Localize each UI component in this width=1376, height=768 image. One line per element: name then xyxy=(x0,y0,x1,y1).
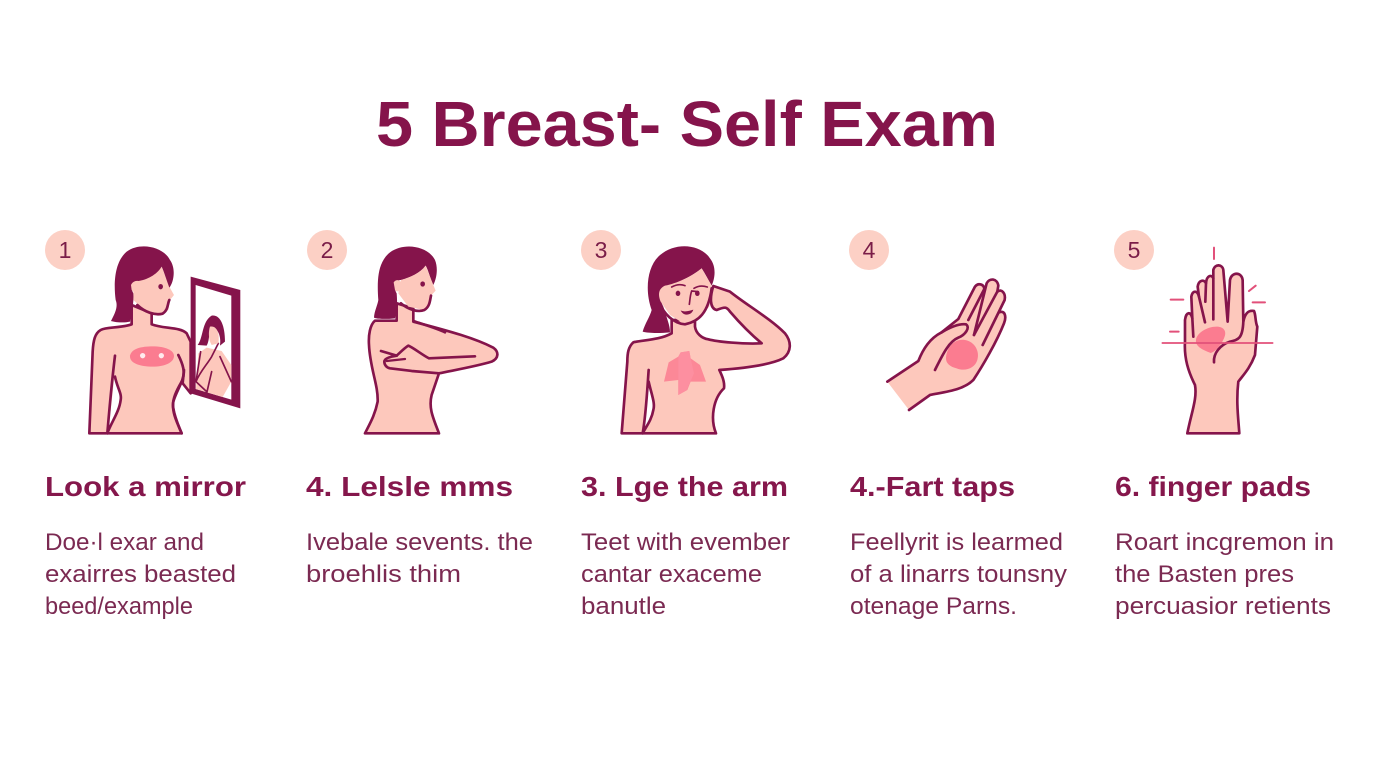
panel: step 2 raised arm xyxy=(307,230,497,433)
panel: step 3 hand behind head xyxy=(581,230,790,433)
icon: woman with arm across chest xyxy=(365,247,497,433)
step 2 description: broehlis thim xyxy=(306,561,461,588)
step 1 description: beed/example xyxy=(45,593,193,620)
title: 5 Breast- Self Exam xyxy=(376,88,998,160)
icon: woman with hand behind head xyxy=(622,246,790,433)
number badge 1 xyxy=(45,230,85,270)
icon: raised palm with lines xyxy=(1162,248,1273,433)
number badge 1: 1 xyxy=(59,237,71,263)
number badge 2 xyxy=(307,230,347,270)
step 1 heading: Look a mirror xyxy=(45,471,246,502)
step 4 heading: 4.-Fart taps xyxy=(850,471,1015,502)
step 3 description xyxy=(581,529,790,620)
step 5 heading: 6. finger pads xyxy=(1115,471,1311,502)
step 5 description: the Basten pres xyxy=(1115,561,1294,588)
step 4 description: otenage Parns. xyxy=(850,593,1017,620)
number badge 4 xyxy=(849,230,889,270)
number badge 2: 2 xyxy=(321,237,333,263)
step 3 heading: 3. Lge the arm xyxy=(581,471,788,502)
step 3 description: Teet with evember xyxy=(581,529,790,556)
step 3 description: cantar exaceme xyxy=(581,561,762,588)
step 2 heading: 4. Lelsle mms xyxy=(306,471,513,502)
step 3 description: banutle xyxy=(581,593,666,620)
step 1 description: exairres beasted xyxy=(45,561,236,588)
icon: woman looking in mirror xyxy=(89,246,240,433)
number badge 4: 4 xyxy=(863,237,876,263)
step 2 description xyxy=(306,529,533,588)
step 1 description xyxy=(45,529,236,620)
panel: step 4 hand xyxy=(849,230,1005,410)
step 1 description: Doe·l exar and xyxy=(45,529,204,556)
step 5 description: percuasior retients xyxy=(1115,593,1331,620)
number badge 5 xyxy=(1114,230,1154,270)
step 4 description: Feellyrit is learmed xyxy=(850,529,1063,556)
step 5 description: Roart incgremon in xyxy=(1115,529,1334,556)
icon: angled open hand with pink palm xyxy=(887,280,1005,410)
number badge 3 xyxy=(581,230,621,270)
step 4 description xyxy=(850,529,1067,620)
number badge 5: 5 xyxy=(1128,237,1140,263)
step 4 description: of a linarrs tounsny xyxy=(850,561,1067,588)
panel: step 1 look in mirror xyxy=(45,230,240,433)
step 5 description xyxy=(1115,529,1334,620)
step 2 description: Ivebale sevents. the xyxy=(306,529,533,556)
number badge 3: 3 xyxy=(595,237,607,263)
panel: step 5 raised hand xyxy=(1114,230,1273,433)
